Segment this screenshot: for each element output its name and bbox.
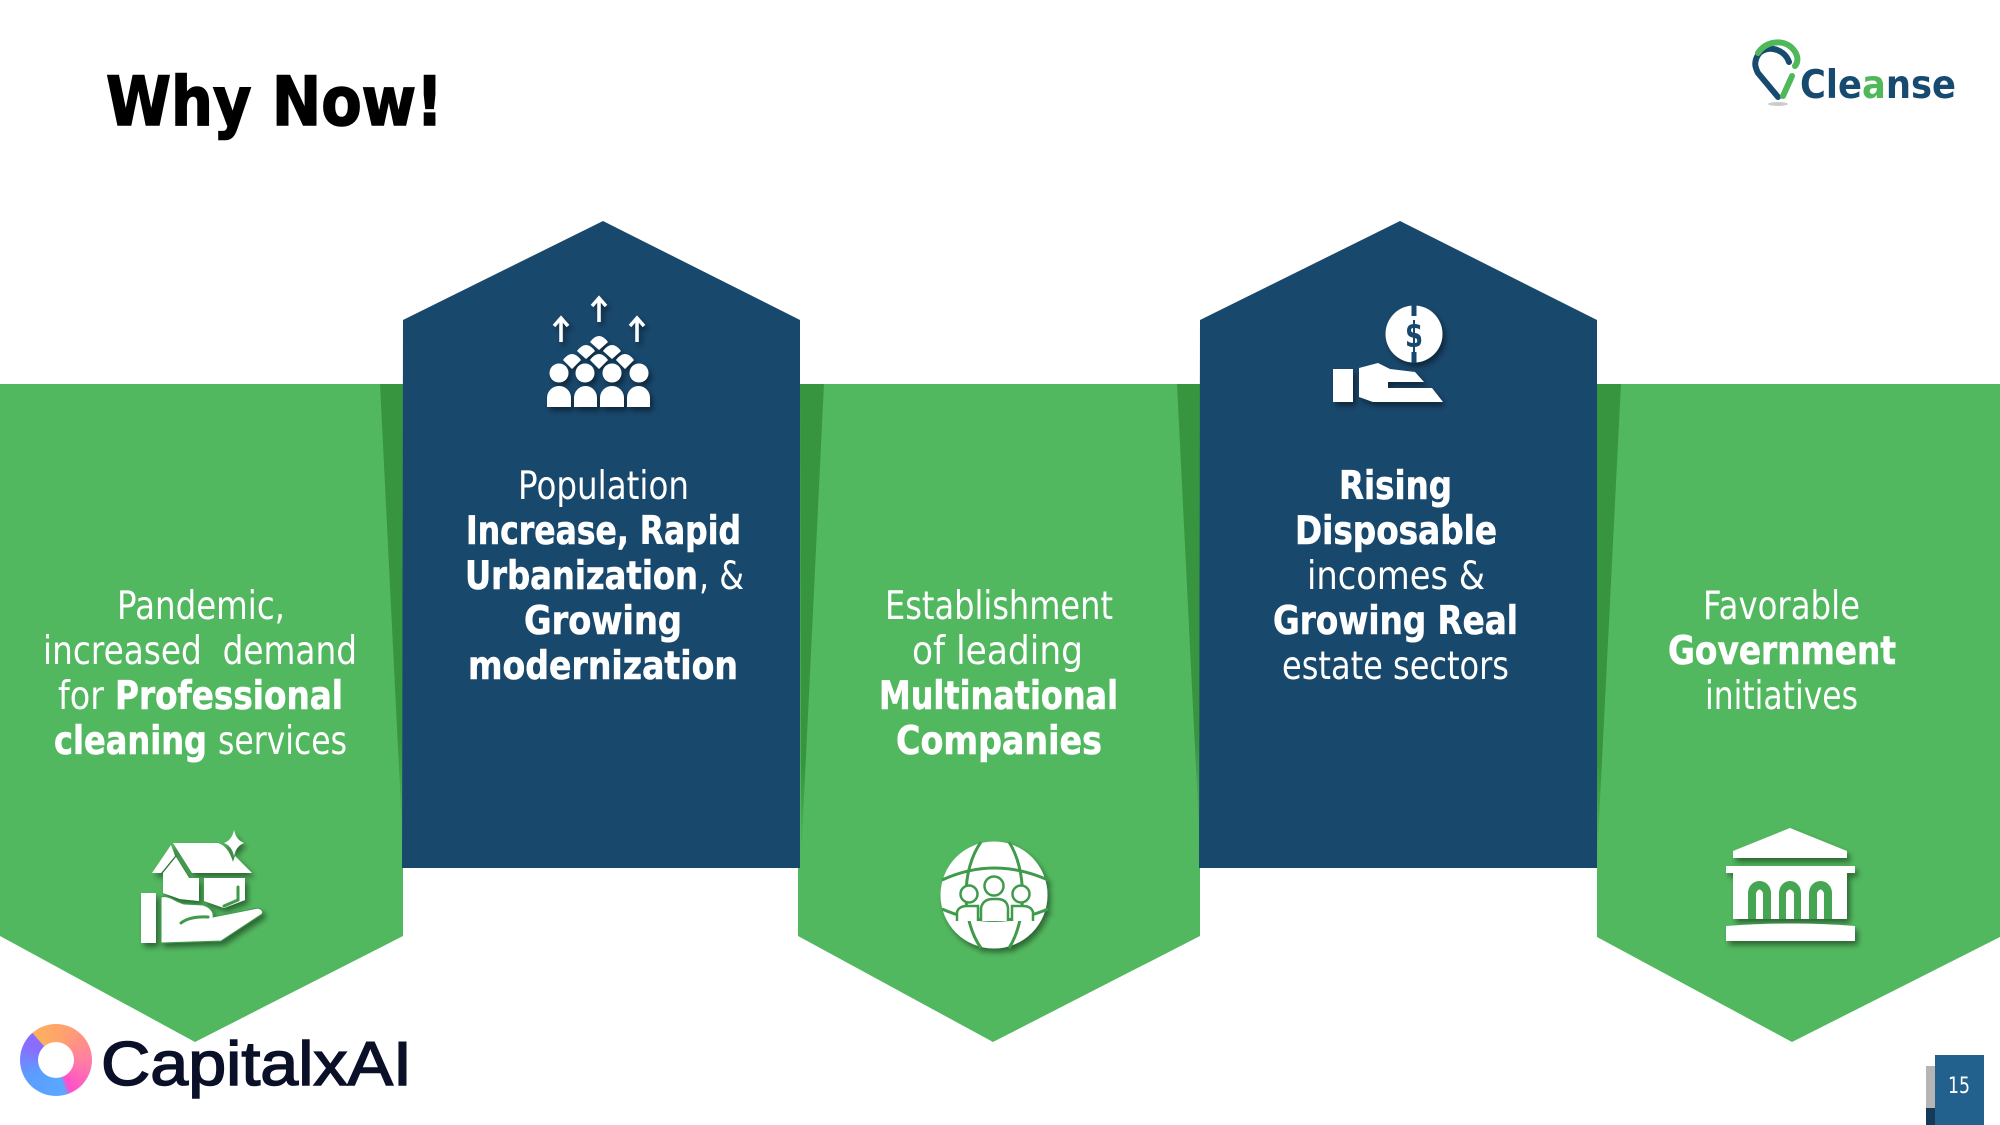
text: multinational companies	[879, 584, 1118, 764]
text: pandemic: increased demand	[43, 629, 357, 674]
text: pandemic	[43, 584, 357, 764]
page number	[1926, 1055, 1984, 1125]
page number: 15	[1948, 1074, 1970, 1099]
icon: coin over hand	[1333, 305, 1443, 402]
panel: population and urbanization	[380, 221, 824, 868]
panel: government initiatives	[1597, 384, 2000, 1042]
text: multinational companies: Multinational	[879, 674, 1118, 719]
logo: CapitalxAI: CapitalxAI	[101, 1030, 412, 1099]
icon: house in hand	[141, 830, 262, 943]
text: disposable incomes and real estate: estate sectors	[1282, 644, 1509, 689]
icon: growing crowd	[547, 298, 650, 407]
logo: Cleanse: Cleanse	[1800, 63, 1956, 108]
text: population and urbanization: , &	[699, 554, 744, 599]
icon: coin over hand: $	[1405, 315, 1423, 356]
text: pandemic: for	[58, 674, 105, 719]
text: pandemic: Professional	[115, 674, 343, 719]
panel: pandemic and cleaning demand	[0, 384, 403, 1042]
text: pandemic: services	[218, 719, 347, 764]
text: population and urbanization: Urbanization	[465, 554, 698, 599]
icon: globe with people	[940, 842, 1048, 948]
text: population and urbanization: Growing	[524, 599, 682, 644]
icon: government building	[1726, 828, 1855, 941]
text: disposable incomes and real estate: Growing Real	[1273, 599, 1518, 644]
logo: Cleanse	[1755, 42, 1956, 108]
panel: disposable incomes and real estate	[1177, 221, 1621, 868]
text: multinational companies: of leading	[912, 629, 1083, 674]
text: government initiatives: Favorable	[1703, 584, 1860, 629]
text: disposable incomes and real estate: incomes &	[1307, 554, 1485, 599]
title: Why Now!	[106, 63, 443, 142]
logo: CapitalxAI	[20, 1024, 412, 1099]
text: disposable incomes and real estate	[1273, 464, 1518, 689]
panel: multinational companies	[798, 384, 1200, 1042]
text: government initiatives: Government	[1668, 629, 1896, 674]
text: pandemic: cleaning	[54, 719, 207, 764]
text: multinational companies: Establishment	[885, 584, 1113, 629]
text: government initiatives	[1668, 584, 1896, 719]
text: multinational companies: Companies	[896, 719, 1102, 764]
text: pandemic: Pandemic,	[117, 584, 285, 629]
text: population and urbanization: Increase, Rapid	[466, 509, 741, 554]
text: population and urbanization: Population	[518, 464, 689, 509]
text: government initiatives: initiatives	[1705, 674, 1858, 719]
text: disposable incomes and real estate: Disposable	[1295, 509, 1497, 554]
text: disposable incomes and real estate: Rising	[1339, 464, 1452, 509]
text: population and urbanization: modernization	[468, 644, 738, 689]
text: population and urbanization	[465, 464, 744, 689]
